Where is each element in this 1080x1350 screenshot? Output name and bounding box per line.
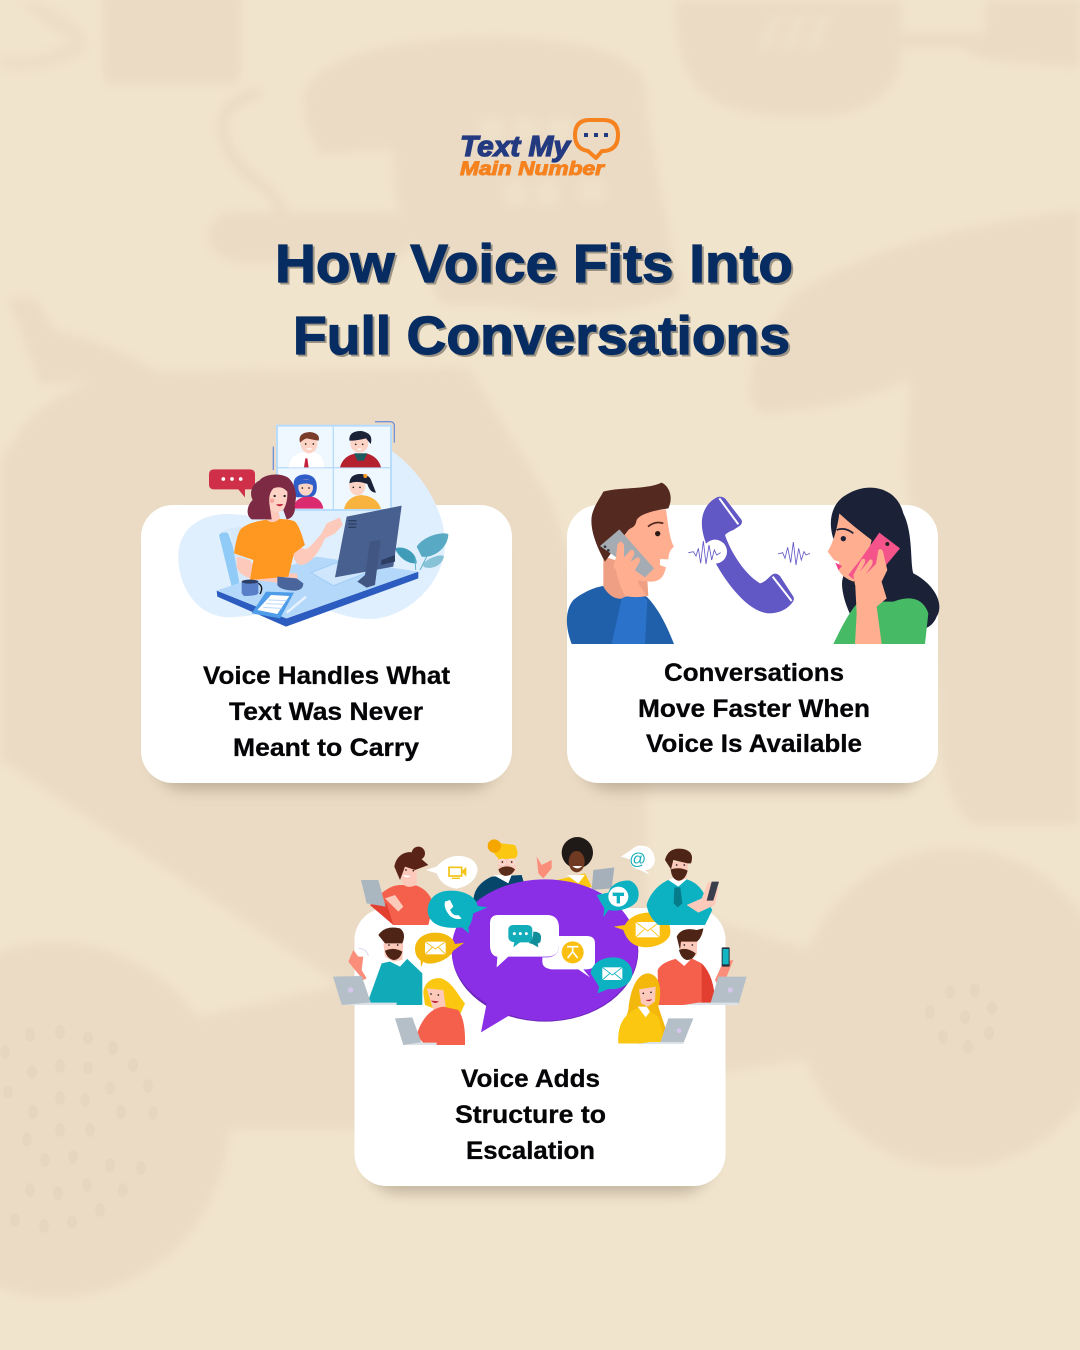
panel: conversations move faster when voice is available xyxy=(567,483,939,790)
logo xyxy=(460,120,618,180)
title: How Voice Fits Into xyxy=(275,234,793,294)
text: card 2 caption: Conversations xyxy=(664,659,844,687)
illustration: team around purple chat bubble: @ xyxy=(629,849,646,868)
text: card 1 caption: Meant to Carry xyxy=(233,734,419,762)
text: card 2 caption xyxy=(638,659,870,758)
title: Full Conversations xyxy=(293,306,790,366)
text: card 3 caption: Escalation xyxy=(466,1137,595,1165)
text: card 2 caption: Voice Is Available xyxy=(646,730,862,758)
text: card 1 caption xyxy=(203,662,451,762)
logo: Text My xyxy=(460,131,572,163)
text: card 3 caption xyxy=(455,1065,606,1165)
title: Full Conversations xyxy=(295,308,792,368)
text: card 3 caption: Structure to xyxy=(455,1101,606,1129)
illustration: woman on video call xyxy=(178,422,448,627)
text: card 1 caption: Voice Handles What xyxy=(203,662,451,690)
panel: voice handles what text was never meant to carry xyxy=(141,422,512,790)
icon: logo speech bubble xyxy=(575,120,618,158)
text: card 2 caption: Move Faster When xyxy=(638,695,870,723)
illustration: team around purple chat bubble xyxy=(333,837,747,1045)
title xyxy=(275,234,795,368)
illustration: two people on phones with handset xyxy=(567,483,939,644)
panel: voice adds structure to escalation xyxy=(333,837,747,1193)
logo: Main Number xyxy=(460,158,606,180)
text: card 1 caption: Text Was Never xyxy=(229,698,423,726)
text: card 3 caption: Voice Adds xyxy=(461,1065,600,1093)
title: How Voice Fits Into xyxy=(277,236,795,296)
